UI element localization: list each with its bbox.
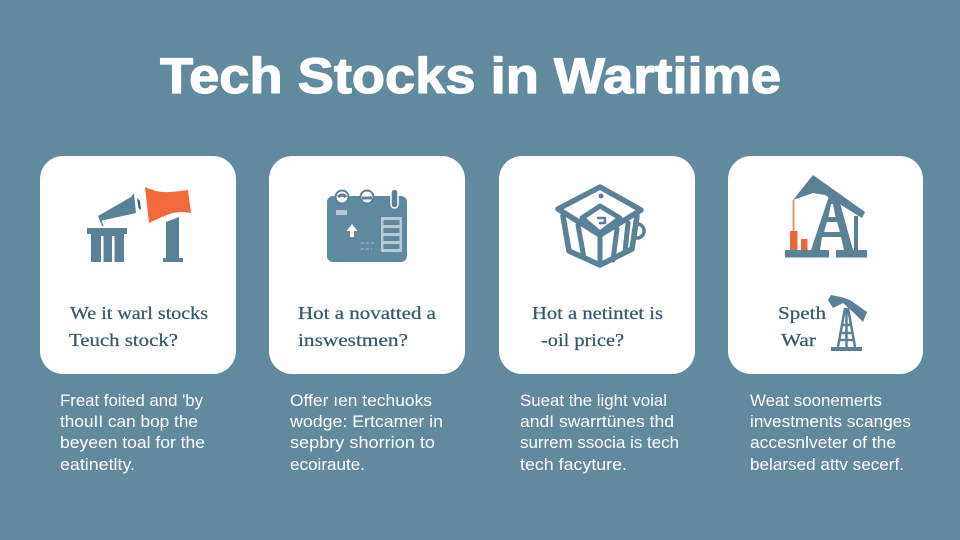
- panel: war stocks: [40, 156, 236, 374]
- text block: war stocks description: Freat foited and 'by: [60, 392, 204, 410]
- panel: war: [728, 156, 923, 374]
- text block: war stocks description: [60, 392, 205, 474]
- text block: oil price description: tech facyture.: [520, 456, 627, 474]
- panel: investment: [269, 156, 465, 374]
- icon: crate: [558, 187, 644, 265]
- heading: -oil price?: [541, 330, 624, 350]
- heading: Speth: [778, 303, 826, 323]
- heading: Hot a netintet is: [532, 303, 663, 323]
- title: Tech Stocks in Wartiime: [160, 48, 781, 104]
- text block: war stocks description: thouII can bop the: [60, 413, 198, 431]
- text block: oil price description: [520, 392, 679, 474]
- text block: war stocks description: beyeen toal for the: [60, 434, 205, 452]
- icon: oil pumpjack: [785, 175, 867, 258]
- text block: oil price description: surrem ssocia is tech: [520, 434, 679, 452]
- heading: [778, 303, 826, 350]
- text block: war description: belarsed attv secerf.: [750, 456, 904, 474]
- heading: [69, 303, 208, 350]
- text block: war description: Weat soonemerts: [750, 392, 882, 410]
- text block: investment description: Offer ıen techuoks: [290, 392, 432, 410]
- text block: investment description: sepbry shorrion to: [290, 434, 435, 452]
- icon: small oil derrick: [828, 295, 867, 351]
- text block: oil price description: andI swarrtünes thd: [520, 413, 674, 431]
- heading: Hot a novatted a: [298, 303, 436, 323]
- panel: oil price: [499, 156, 695, 374]
- text block: war stocks description: eatinetlty.: [60, 456, 135, 474]
- heading: War: [781, 330, 816, 350]
- text block: investment description: wodge: Ertcamer in: [289, 413, 443, 431]
- text block: oil price description: Sueat the light voial: [520, 392, 667, 410]
- text block: war description: investments scanges: [750, 413, 911, 431]
- heading: [298, 303, 436, 350]
- icon: calendar: [327, 189, 407, 262]
- text block: investment description: [289, 392, 443, 474]
- heading: We it warl stocks: [70, 303, 208, 323]
- text block: war description: [750, 392, 911, 474]
- heading: [532, 303, 663, 350]
- text block: war description: accesnlveter of the: [750, 434, 896, 452]
- heading: inswestmen?: [298, 330, 408, 350]
- heading: Teuch stock?: [69, 330, 178, 350]
- icon: megaphone, flag and columns: [87, 187, 191, 262]
- text block: investment description: ecoiraute.: [290, 456, 365, 474]
